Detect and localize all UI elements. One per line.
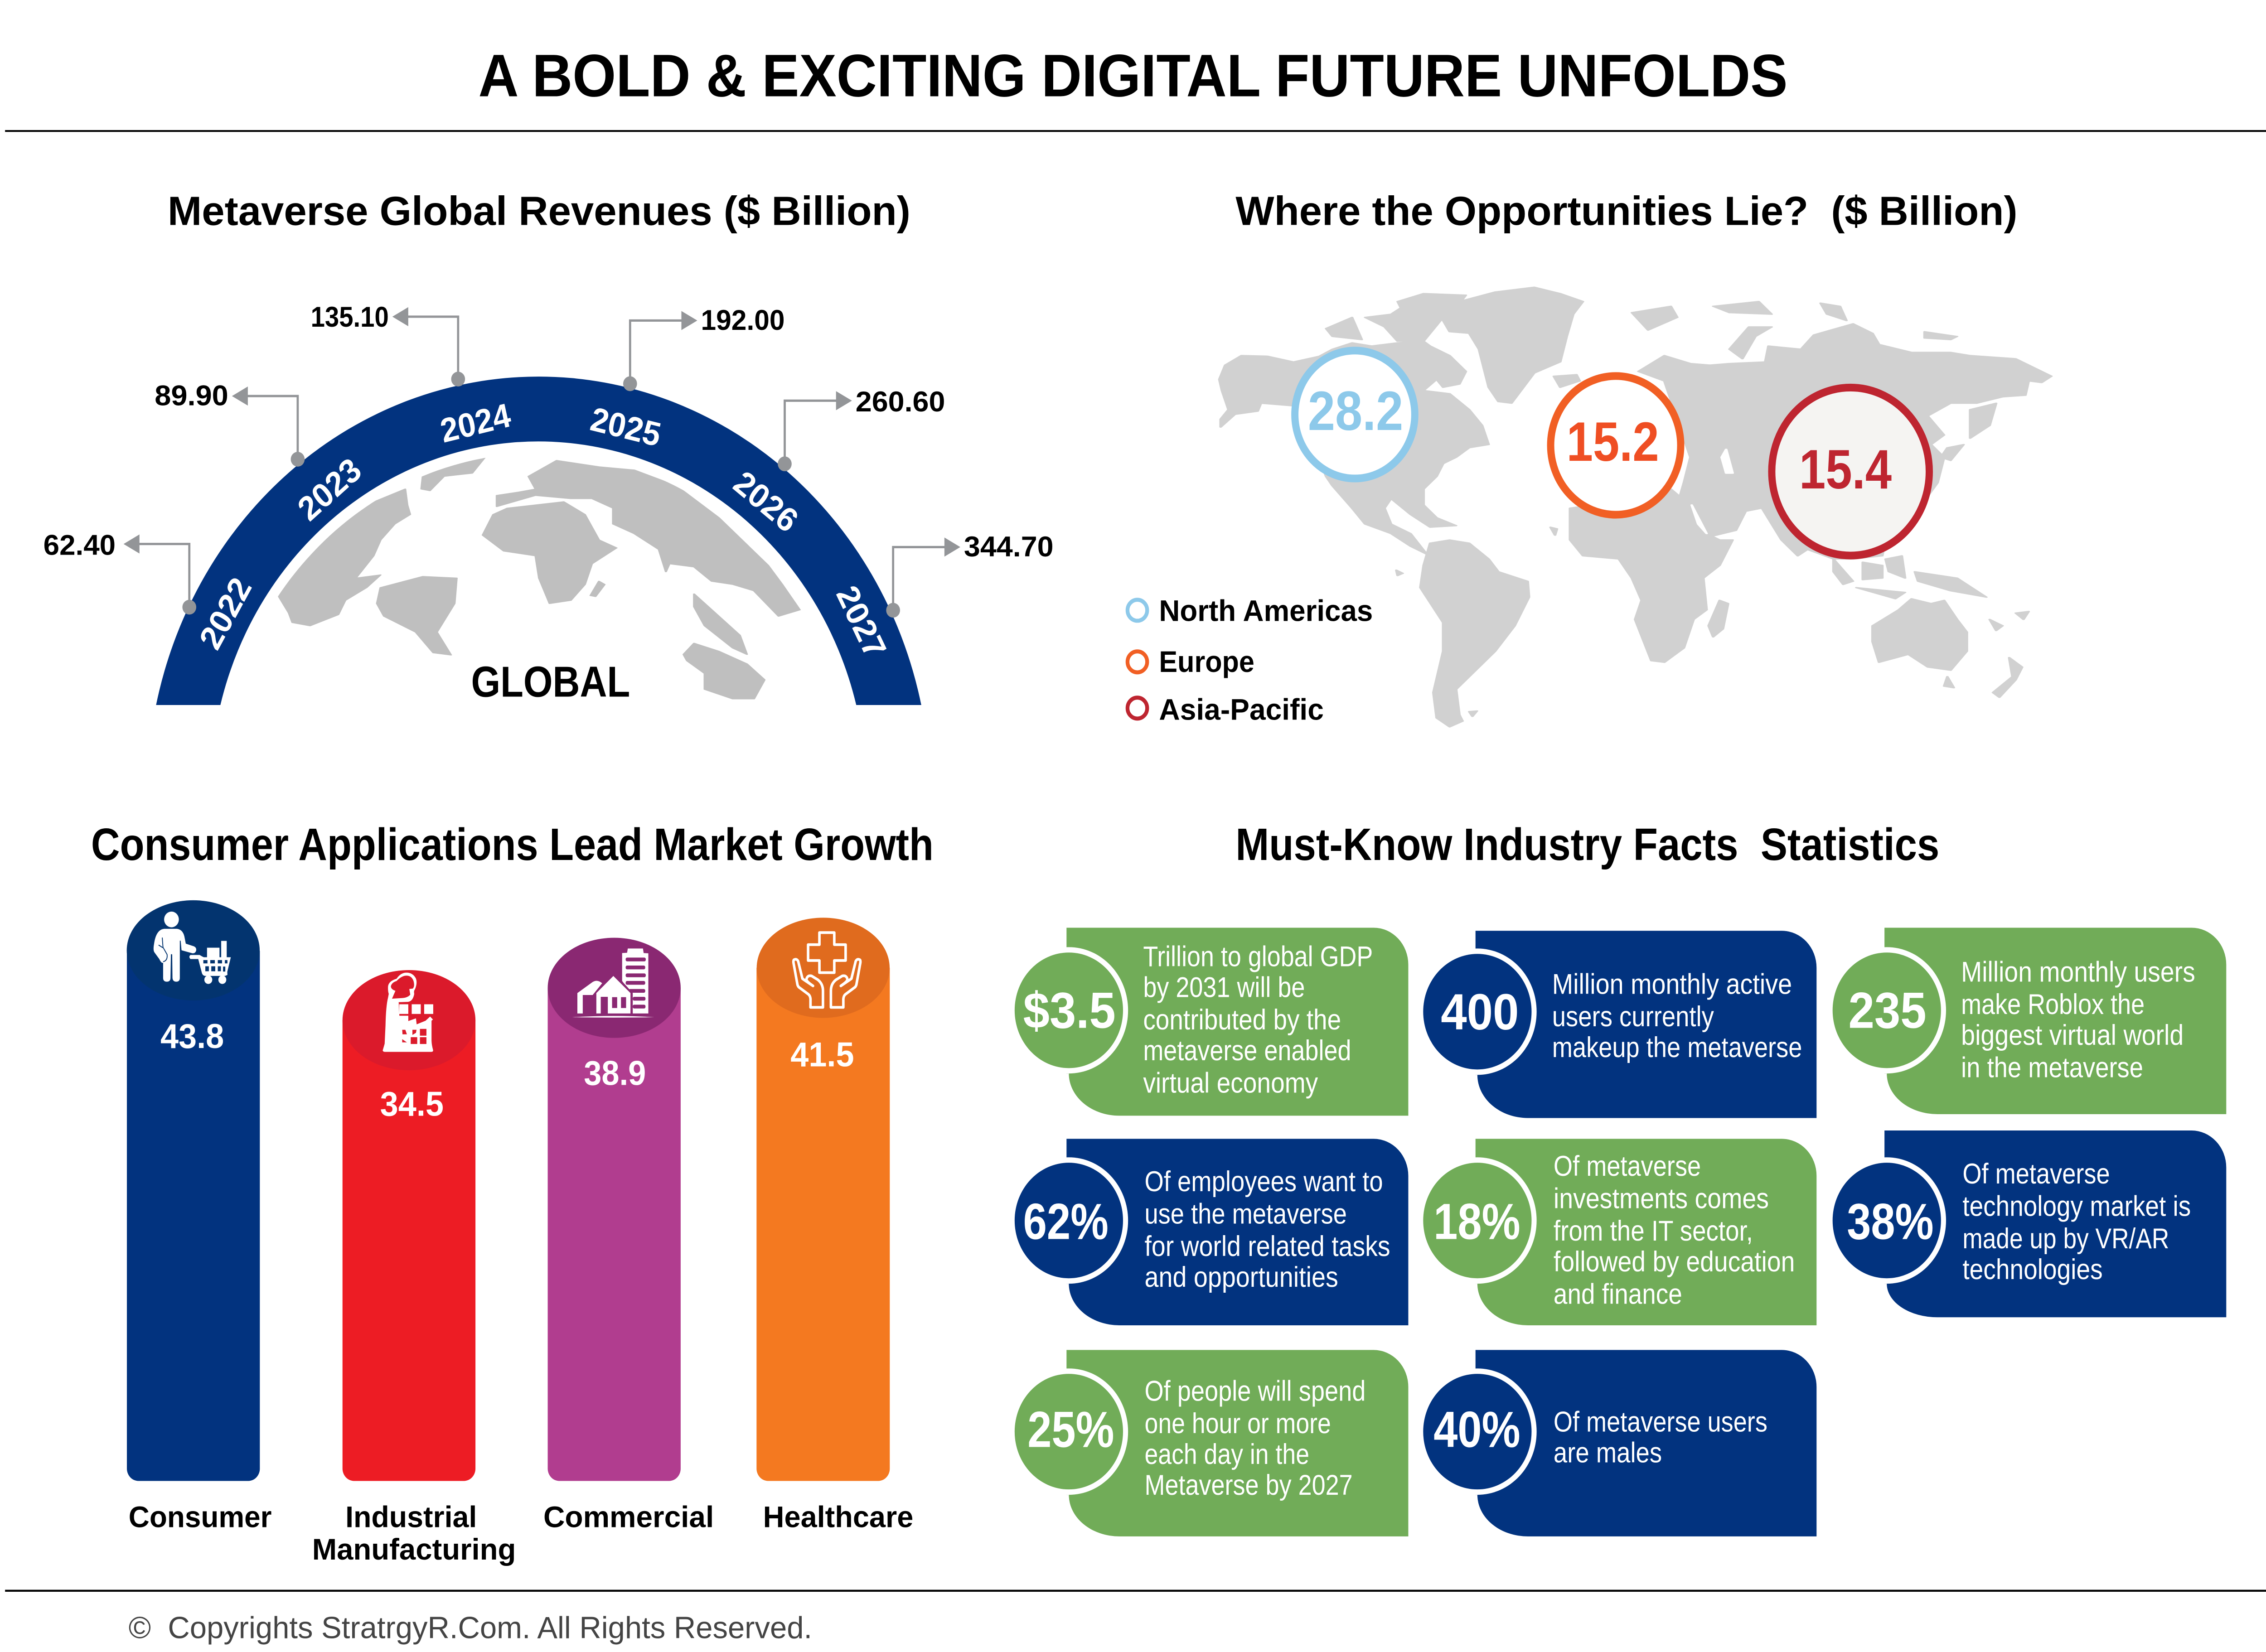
card: $3.5: $3.5 xyxy=(1023,982,1116,1039)
card: 25%: 25% xyxy=(1027,1402,1114,1458)
card: 62%: for world related tasks xyxy=(1145,1230,1390,1262)
card: 25%: each day in the xyxy=(1145,1438,1309,1470)
heading: global revenues: Metaverse Global Revenues ($ Billion) xyxy=(168,188,910,234)
year labels: 2027 xyxy=(829,580,893,664)
card: $3.5: virtual economy xyxy=(1143,1067,1318,1099)
value: industrial: 34.5 xyxy=(380,1084,444,1123)
card: 62% xyxy=(1010,1139,1408,1325)
arc band xyxy=(156,377,921,705)
bar: consumer xyxy=(127,900,271,1534)
bubble: north americas xyxy=(1295,351,1415,478)
card: 235: in the metaverse xyxy=(1961,1052,2143,1083)
label: consumer: Consumer xyxy=(129,1500,271,1534)
bar: commercial xyxy=(543,938,714,1534)
leader 2023 value xyxy=(155,380,305,467)
card: 38%: 38% xyxy=(1847,1193,1934,1250)
leader 2026 value: 260.60 xyxy=(856,386,945,418)
card: 25%: Of people will spend xyxy=(1145,1375,1365,1407)
card: 18%: 18% xyxy=(1433,1193,1520,1250)
year labels: 2025 xyxy=(587,400,664,454)
card: 235: biggest virtual world xyxy=(1961,1019,2184,1051)
card: 38% xyxy=(1828,1130,2226,1317)
card: 18%: and finance xyxy=(1554,1278,1682,1310)
leader 2025 value: 192.00 xyxy=(701,304,785,336)
card: 25%: Metaverse by 2027 xyxy=(1145,1469,1353,1501)
title: A BOLD & EXCITING DIGITAL FUTURE UNFOLDS xyxy=(478,43,1788,109)
heading: opportunities: Where the Opportunities Lie? ($ Billion) xyxy=(1235,188,2018,234)
card: 235: 235 xyxy=(1848,982,1927,1039)
bubble: europe: 15.2 xyxy=(1567,411,1659,473)
legend: North Americas xyxy=(1159,594,1373,628)
card: 18%: Of metaverse xyxy=(1554,1150,1701,1182)
panel: metaverse global revenues xyxy=(44,188,1054,706)
card: $3.5: metaverse enabled xyxy=(1143,1034,1351,1066)
label: industrial manufacturing xyxy=(312,1500,516,1566)
leader 2027 value xyxy=(886,531,1054,618)
card: 62%: and opportunities xyxy=(1145,1261,1338,1293)
panel: where the opportunities lie xyxy=(1128,188,2052,727)
bubble: asia-pacific xyxy=(1772,387,1929,555)
bubble: north americas: 28.2 xyxy=(1308,381,1403,442)
card: $3.5: Trillion to global GDP xyxy=(1143,941,1373,972)
bubble: asia-pacific: 15.4 xyxy=(1799,439,1892,501)
bubble: europe xyxy=(1551,376,1681,515)
label: commercial: Commercial xyxy=(543,1500,714,1534)
card: 25%: one hour or more xyxy=(1145,1407,1331,1439)
bar: industrial manufacturing xyxy=(312,970,516,1566)
panel: industry facts xyxy=(1010,819,2226,1536)
icon: factory xyxy=(383,973,433,1052)
icon: hands holding medical cross xyxy=(794,932,861,1007)
card: 40% xyxy=(1418,1350,1816,1536)
label: healthcare: Healthcare xyxy=(763,1500,913,1534)
value: consumer: 43.8 xyxy=(160,1017,224,1055)
card: 235 xyxy=(1828,927,2226,1114)
card: 400: 400 xyxy=(1441,984,1519,1041)
panel: consumer applications xyxy=(91,819,934,1566)
heading: industry facts: Must-Know Industry Facts Statistics xyxy=(1235,819,1939,869)
label: industrial manufacturing: Manufacturing xyxy=(312,1532,516,1566)
card: 38%: Of metaverse xyxy=(1962,1158,2110,1189)
card: 40%: 40% xyxy=(1433,1402,1520,1458)
card: 400: users currently xyxy=(1552,1000,1714,1033)
card: 18% xyxy=(1418,1139,1816,1325)
card: 235: Million monthly users xyxy=(1961,956,2195,988)
leader 2026 value xyxy=(778,386,945,471)
label: industrial manufacturing: Industrial xyxy=(345,1500,477,1534)
leader 2025 value xyxy=(623,304,785,391)
value: healthcare: 41.5 xyxy=(790,1035,854,1074)
year labels: 2023 xyxy=(291,450,368,528)
footer rule xyxy=(5,1590,2266,1592)
card: 400: Million monthly active xyxy=(1552,968,1792,1000)
bar: healthcare xyxy=(756,918,913,1534)
card: 18%: followed by education xyxy=(1554,1246,1795,1277)
leader 2022 value xyxy=(44,529,196,614)
icon: buildings xyxy=(572,948,654,1018)
year labels: 2022 xyxy=(193,571,259,656)
card: 38%: technologies xyxy=(1962,1253,2103,1285)
card: 400 xyxy=(1418,931,1816,1118)
label: global: GLOBAL xyxy=(471,657,630,706)
year labels: 2026 xyxy=(727,464,805,540)
legend: Asia-Pacific xyxy=(1159,692,1324,726)
globe land map xyxy=(278,456,800,699)
icon: shopper with cart xyxy=(154,912,231,984)
card: 62%: Of employees want to xyxy=(1145,1165,1383,1197)
card: 25% xyxy=(1010,1350,1408,1536)
card: 235: make Roblox the xyxy=(1961,988,2145,1020)
header rule xyxy=(5,130,2266,132)
leader 2027 value: 344.70 xyxy=(964,531,1054,562)
leader 2023 value: 89.90 xyxy=(155,380,228,411)
year labels: 2024 xyxy=(437,396,514,450)
legend: Europe xyxy=(1159,645,1254,678)
card: 40%: are males xyxy=(1554,1437,1662,1468)
card: 62%: 62% xyxy=(1023,1193,1109,1250)
card: 38%: made up by VR/AR xyxy=(1962,1222,2169,1254)
year labels xyxy=(193,396,893,664)
card: $3.5: contributed by the xyxy=(1143,1004,1341,1035)
card: 18%: from the IT sector, xyxy=(1554,1215,1753,1246)
heading: consumer applications: Consumer Applications Lead Market Growth xyxy=(91,819,934,869)
value: commercial: 38.9 xyxy=(584,1053,646,1092)
footer copyright: © Copyrights StratrgyR.Com. All Rights Reserved. xyxy=(129,1610,812,1645)
legend xyxy=(1128,594,1373,726)
card: 18%: investments comes xyxy=(1554,1183,1769,1214)
leader 2024 value xyxy=(311,301,465,386)
card: $3.5: by 2031 will be xyxy=(1143,971,1305,1003)
leader 2022 value: 62.40 xyxy=(44,529,116,561)
card: 40%: Of metaverse users xyxy=(1554,1406,1767,1438)
card: 400: makeup the metaverse xyxy=(1552,1031,1802,1063)
world map xyxy=(1219,287,2052,727)
card: 38%: technology market is xyxy=(1962,1190,2191,1222)
leader 2024 value: 135.10 xyxy=(311,301,389,333)
card: $3.5 xyxy=(1010,927,1408,1116)
card: 62%: use the metaverse xyxy=(1145,1198,1347,1230)
